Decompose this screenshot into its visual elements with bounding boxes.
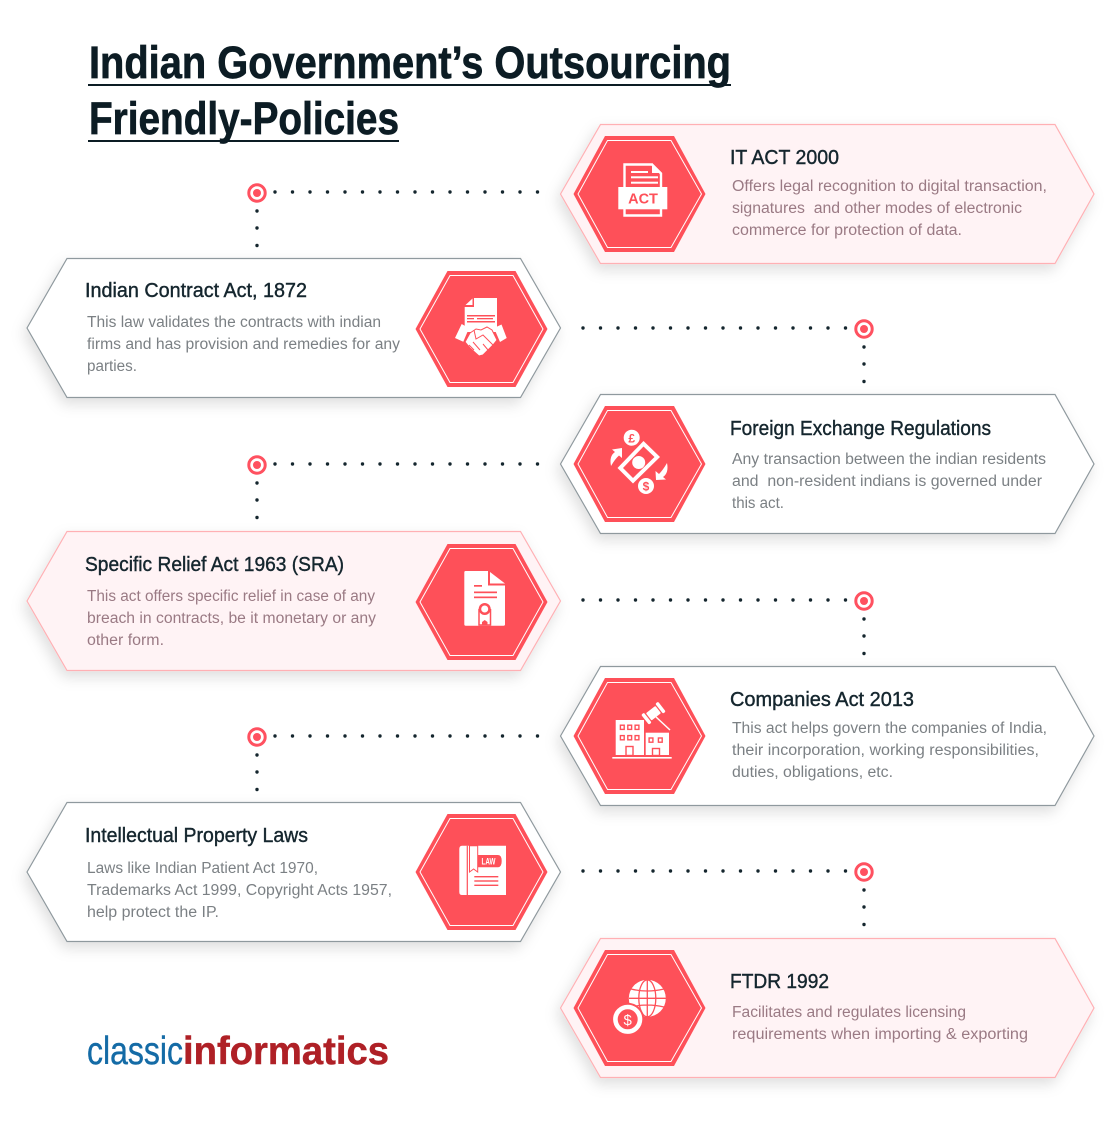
icon: buildings and gavel xyxy=(574,678,706,794)
text block: other form. xyxy=(87,632,164,649)
logo: classicinformatics xyxy=(87,1030,389,1073)
text block xyxy=(732,178,1047,239)
icon: currency exchange: £ xyxy=(628,432,635,446)
title: Friendly-Policies xyxy=(89,93,399,144)
title: Indian Government’s Outsourcing xyxy=(89,37,731,88)
text block xyxy=(87,588,376,649)
icon: certificate document xyxy=(416,544,548,660)
heading: Foreign Exchange Regulations xyxy=(730,418,991,440)
text block: parties. xyxy=(87,358,137,375)
icon: globe and dollar coin xyxy=(574,950,706,1066)
text block: signatures and other modes of electronic xyxy=(732,200,1022,217)
text block: Laws like Indian Patient Act 1970, xyxy=(87,860,318,877)
heading: Companies Act 2013 xyxy=(730,689,914,711)
text block xyxy=(732,451,1046,512)
icon: handshake and contract xyxy=(416,271,548,387)
logo: classicinformatics: informatics xyxy=(183,1030,389,1073)
heading: Intellectual Property Laws xyxy=(85,825,308,847)
connector: Foreign Exchange to Specific Relief xyxy=(249,457,539,519)
panel: IT ACT 2000 xyxy=(560,124,1094,264)
heading: Indian Contract Act, 1872 xyxy=(85,280,307,302)
icon: globe and dollar coin: $ xyxy=(624,1012,633,1029)
logo: classicinformatics: classic xyxy=(87,1030,183,1073)
icon: currency exchange xyxy=(574,406,706,522)
connector: Indian Contract Act to Foreign Exchange xyxy=(581,321,872,383)
text block: their incorporation, working responsibilities, xyxy=(732,742,1039,759)
text block: This act helps govern the companies of India, xyxy=(732,720,1047,737)
text block xyxy=(87,860,392,921)
connector: Intellectual Property to FTDR xyxy=(581,864,872,926)
panel: FTDR 1992 xyxy=(560,938,1094,1078)
text block: This law validates the contracts with indian xyxy=(87,314,381,331)
panel: Foreign Exchange Regulations xyxy=(560,394,1094,534)
text block: breach in contracts, be it monetary or any xyxy=(87,610,376,627)
text block xyxy=(732,1004,1028,1043)
text block: Any transaction between the indian residents xyxy=(732,451,1046,468)
panel: Companies Act 2013 xyxy=(560,666,1094,806)
heading: Specific Relief Act 1963 (SRA) xyxy=(85,554,344,576)
text block: Facilitates and regulates licensing xyxy=(732,1004,966,1021)
text block: this act. xyxy=(732,495,784,512)
text block: duties, obligations, etc. xyxy=(732,764,893,781)
icon: currency exchange: $ xyxy=(643,480,650,494)
title xyxy=(88,37,731,144)
connector: IT Act to Indian Contract Act xyxy=(249,185,539,247)
connector: Specific Relief to Companies Act xyxy=(581,593,872,655)
text block: This act offers specific relief in case of any xyxy=(87,588,375,605)
panel: Intellectual Property Laws xyxy=(27,802,560,942)
panel: Indian Contract Act, 1872 xyxy=(27,258,560,398)
text block: Offers legal recognition to digital transaction, xyxy=(732,178,1047,195)
icon: ACT document xyxy=(574,136,706,252)
text block: firms and has provision and remedies for any xyxy=(87,336,400,353)
panel: Specific Relief Act 1963 (SRA) xyxy=(27,532,560,670)
text block xyxy=(87,314,400,375)
heading: FTDR 1992 xyxy=(730,971,829,993)
text block: Trademarks Act 1999, Copyright Acts 1957, xyxy=(87,882,392,899)
text block: requirements when importing & exporting xyxy=(732,1026,1028,1043)
icon: ACT document: ACT xyxy=(628,192,658,208)
text block: and non-resident indians is governed under xyxy=(732,473,1042,490)
icon: law book xyxy=(416,814,548,930)
text block: help protect the IP. xyxy=(87,904,219,921)
text block: commerce for protection of data. xyxy=(732,222,962,239)
connector: Companies Act to Intellectual Property xyxy=(249,729,539,791)
text block xyxy=(732,720,1047,781)
heading: IT ACT 2000 xyxy=(730,147,839,169)
icon: law book: LAW xyxy=(482,856,496,866)
